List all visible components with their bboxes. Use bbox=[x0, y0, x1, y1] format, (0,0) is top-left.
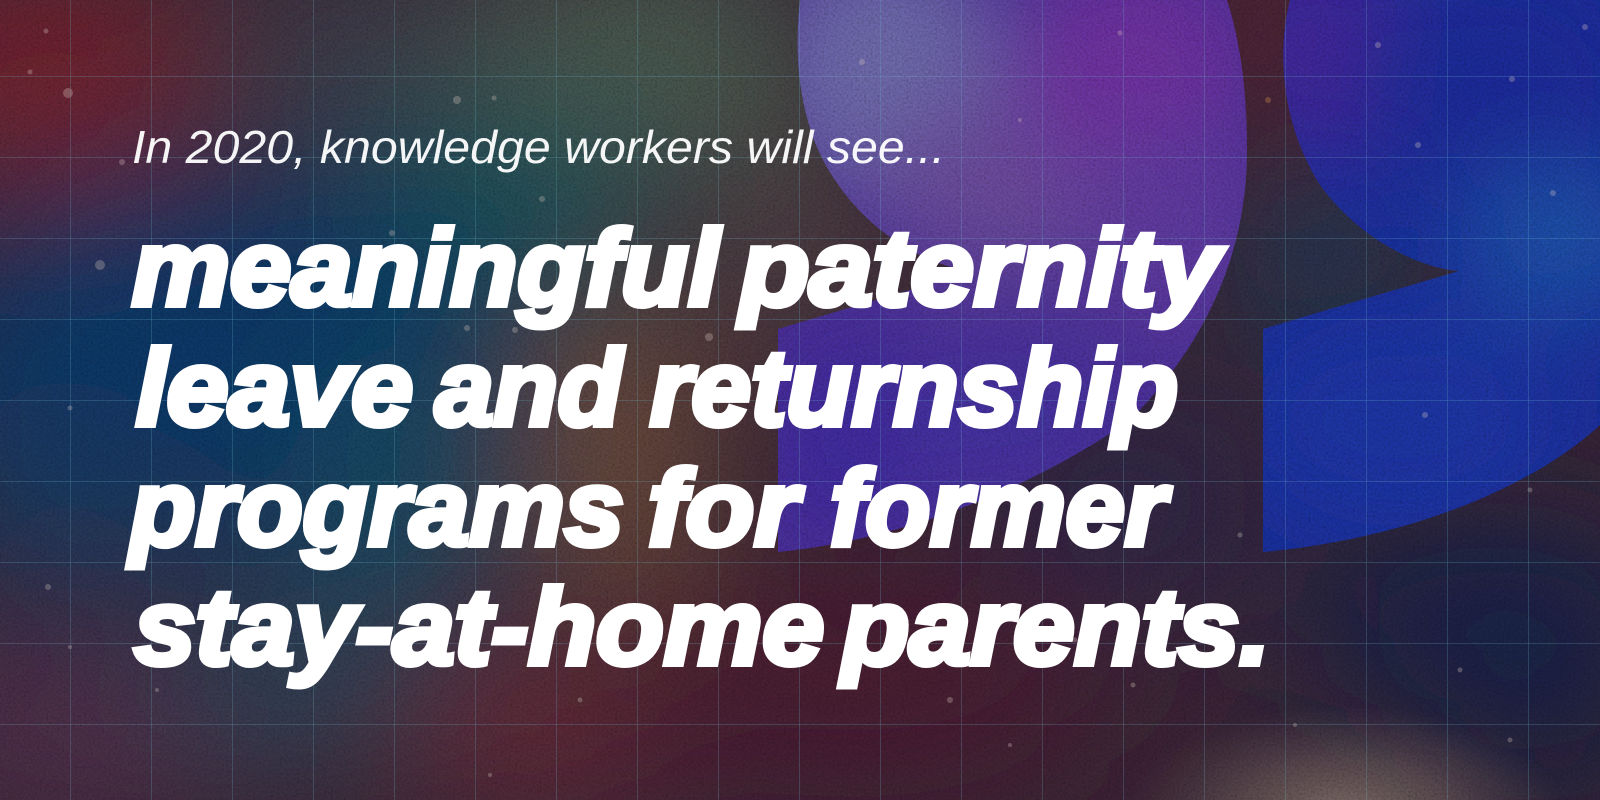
headline: stay-at-home bbox=[134, 566, 824, 687]
headline: former bbox=[830, 447, 1171, 568]
quotation mark: left purple bbox=[778, 0, 1247, 552]
headline: programs bbox=[127, 447, 624, 568]
headline bbox=[127, 207, 1270, 687]
headline: returnship bbox=[650, 327, 1178, 448]
quotation mark: right blue bbox=[1263, 0, 1600, 552]
headline: leave bbox=[136, 327, 413, 448]
headline: paternity bbox=[737, 207, 1225, 328]
headline: and bbox=[435, 327, 624, 448]
tan glow at bottom bbox=[1100, 690, 1590, 800]
headline: meaningful bbox=[132, 207, 721, 328]
headline: parents. bbox=[839, 566, 1270, 687]
headline: for bbox=[648, 447, 803, 568]
subtitle: In 2020, knowledge workers will see... bbox=[132, 121, 945, 173]
